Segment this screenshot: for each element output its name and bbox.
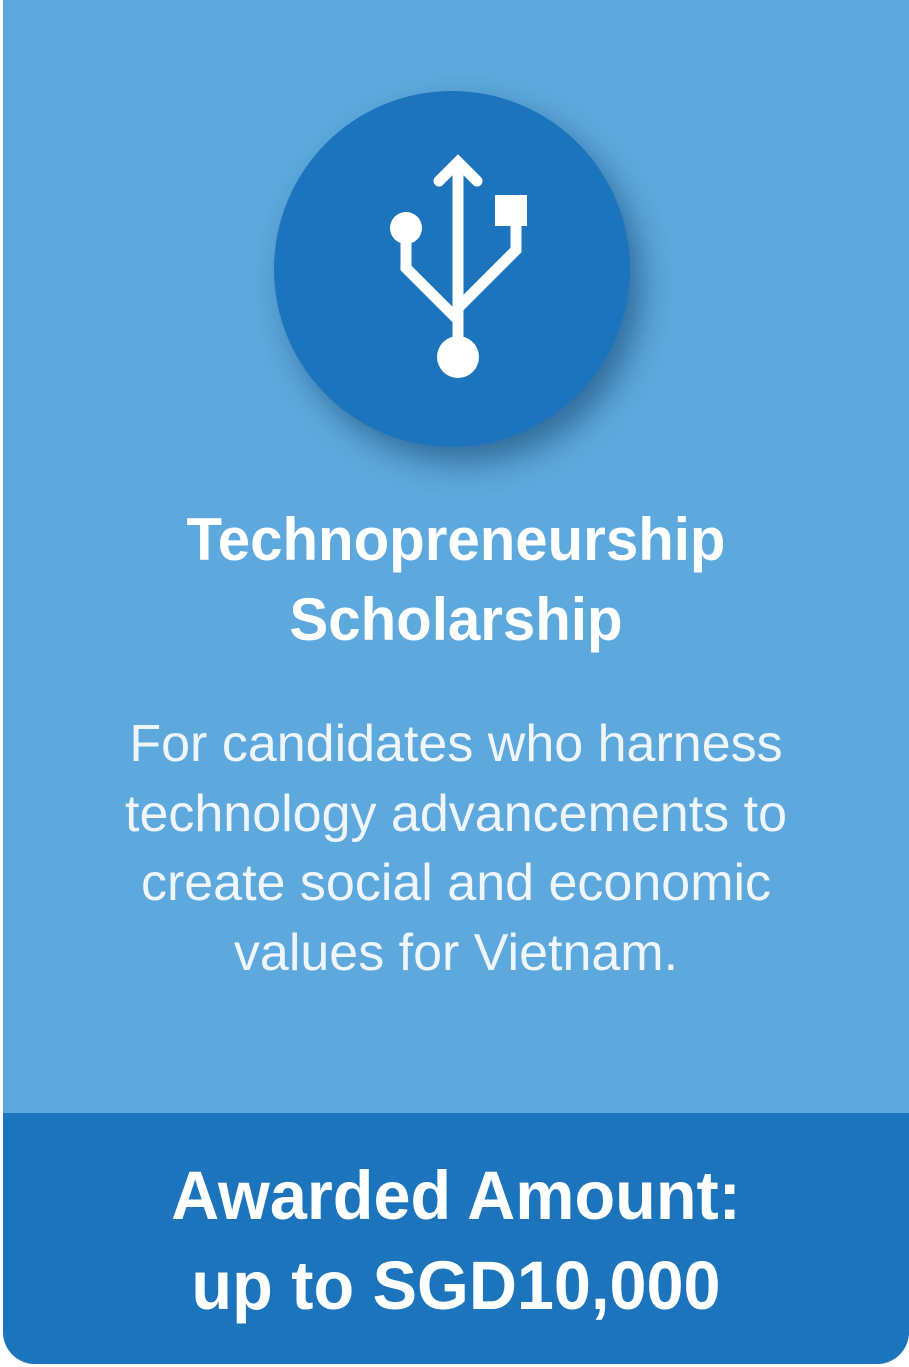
award band [3, 1113, 909, 1364]
description: technology advancements to [125, 784, 787, 842]
award text [171, 1157, 741, 1324]
title [187, 506, 725, 653]
description: values for Vietnam. [234, 924, 678, 982]
icon circle [274, 91, 630, 447]
title: Technopreneurship [187, 506, 725, 573]
title: Scholarship [289, 586, 623, 653]
description: For candidates who harness [129, 715, 783, 773]
award text: up to SGD10,000 [191, 1247, 721, 1324]
description [125, 715, 787, 982]
description: create social and economic [141, 854, 771, 912]
award text: Awarded Amount: [171, 1157, 741, 1234]
